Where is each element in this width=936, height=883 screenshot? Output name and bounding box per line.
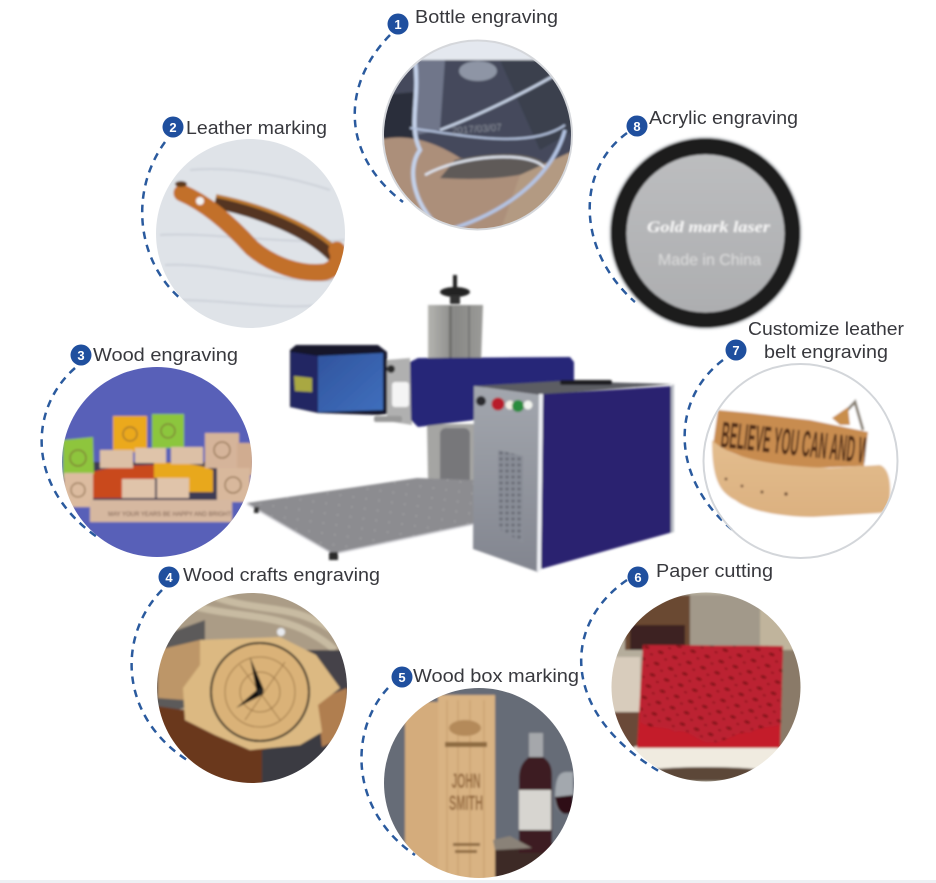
badge 1: 1 [394, 17, 402, 32]
photo: engraved belt [710, 398, 892, 529]
badge 3 [70, 344, 92, 366]
badge 5: 5 [398, 670, 406, 685]
dashed arc 5 [361, 688, 415, 855]
dashed arc 4 [132, 590, 187, 760]
label: Wood engraving: Wood engraving [93, 345, 238, 365]
label: Customize leather belt engraving: belt engraving [764, 342, 888, 362]
panel: 3 wood engraving [42, 344, 260, 565]
label: Customize leather belt engraving: Customize leather [748, 319, 904, 339]
dashed arc 6 [581, 580, 662, 773]
photo: leather strap [156, 139, 345, 328]
machine work table [247, 478, 474, 560]
photo: wooden watch [150, 590, 350, 790]
badge 7: 7 [732, 343, 740, 358]
machine column [427, 275, 483, 492]
dashed arc 7 [685, 360, 735, 532]
photo: wooden wine box: SMITH [449, 792, 483, 815]
photo: wooden wine box: JOHN [452, 770, 480, 793]
badge 6: 6 [634, 570, 642, 585]
label: Paper cutting: Paper cutting [656, 561, 773, 581]
machine arm [374, 357, 574, 427]
dashed arc 3 [42, 368, 100, 539]
machine laser head [290, 345, 387, 415]
badge 1 [388, 14, 408, 34]
label: Customize leather belt engraving [748, 319, 904, 362]
panel: 5 wood box marking [361, 666, 580, 883]
photo ring 7 [704, 364, 898, 558]
label: Acrylic engraving: Acrylic engraving [649, 108, 798, 128]
panel: 8 acrylic engraving [590, 108, 802, 330]
label: Wood crafts engraving: Wood crafts engraving [183, 565, 380, 585]
panel: 2 leather marking [142, 116, 350, 335]
photo: glass bottle: 2017/03/07 [451, 122, 503, 137]
badge 8: 8 [633, 119, 641, 134]
photo: wood blocks: MAY YOUR YEARS BE HAPPY AND BRIGHT [108, 512, 231, 518]
badge 5 [392, 666, 412, 688]
photo ring 1 [383, 40, 572, 230]
central laser machine [247, 275, 674, 572]
label: Wood box marking: Wood box marking [413, 666, 579, 686]
dashed arc 2 [142, 142, 182, 300]
badge 4 [158, 566, 180, 588]
photo: red laser-cut card [612, 592, 800, 782]
panel: 1 bottle engraving [355, 7, 576, 232]
badge 8 [626, 116, 648, 136]
panel: 7 customize leather belt engraving [685, 319, 904, 560]
badge 7 [726, 340, 746, 360]
panel: 6 paper cutting [581, 561, 810, 790]
photo: acrylic disc [608, 136, 802, 330]
label: Leather marking: Leather marking [186, 118, 327, 138]
machine control cabinet [473, 380, 674, 572]
badge 2: 2 [169, 120, 177, 135]
photo: wooden wine box [380, 685, 580, 883]
badge 6 [628, 566, 648, 588]
photo: acrylic disc: Made in China [658, 252, 761, 269]
photo: acrylic disc: Gold mark laser [647, 219, 771, 236]
badge 2 [162, 116, 184, 138]
dashed arc 1 [355, 35, 403, 202]
badge 3: 3 [77, 348, 85, 363]
label: Bottle engraving: Bottle engraving [415, 7, 558, 27]
photo: glass bottle [380, 40, 576, 232]
badge 4: 4 [165, 570, 173, 585]
dashed arc 8 [590, 133, 635, 302]
photo: wood blocks [62, 367, 252, 557]
panel: 4 wood crafts engraving [132, 565, 380, 790]
